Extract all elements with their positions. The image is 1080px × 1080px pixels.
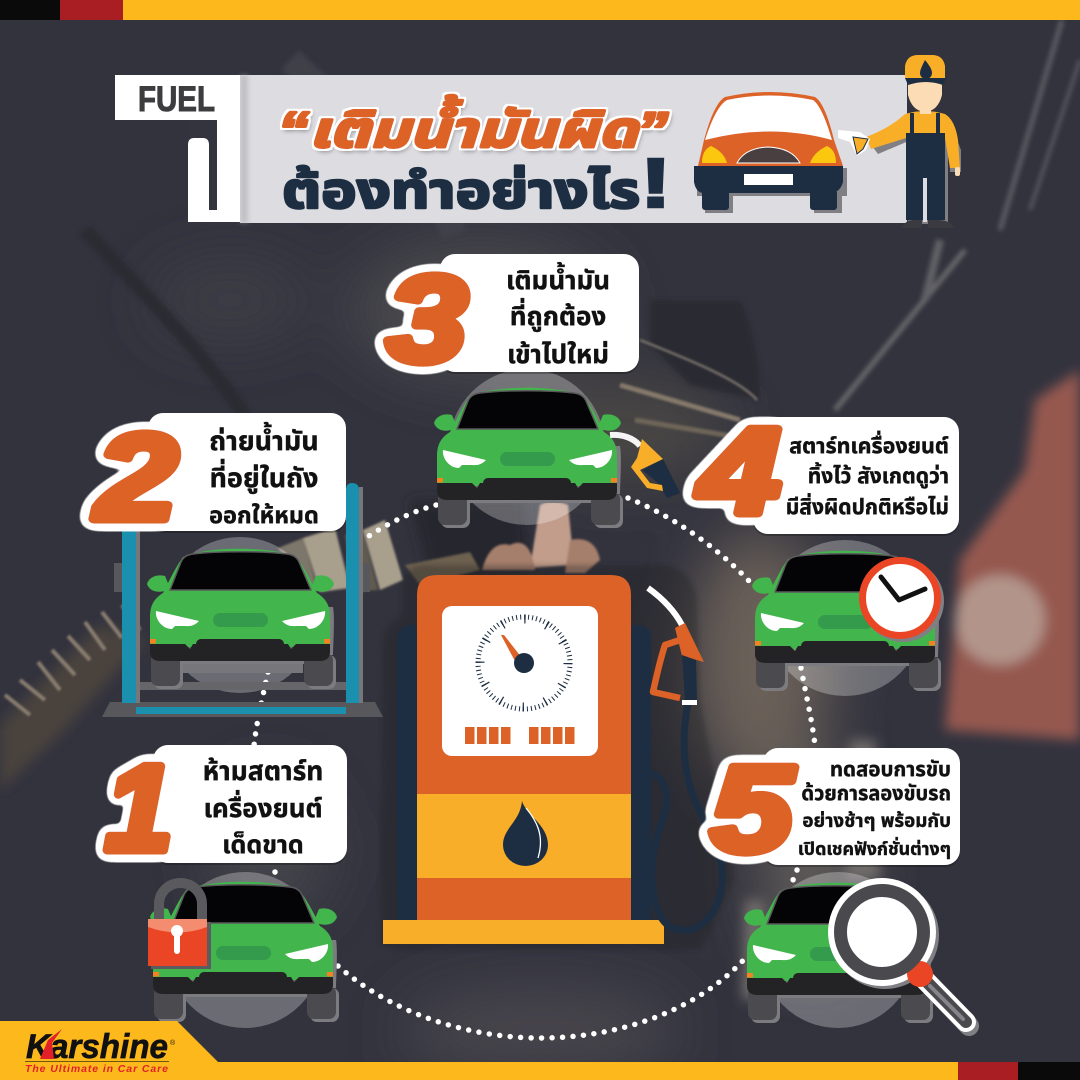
icon: mechanic refuelling [838, 55, 961, 228]
step 3 text: ที่ถูกต้อง [510, 298, 606, 332]
dotted connector path between cars [254, 498, 815, 1038]
vehicle lift [102, 483, 383, 717]
logo: Karshine: ® [170, 1039, 176, 1047]
bubble 2 [93, 409, 346, 545]
number 5: 5 [711, 741, 795, 877]
step 1 text: เครื่องยนต์ [203, 790, 323, 823]
car [752, 551, 941, 691]
bottom colour band [0, 1062, 1080, 1080]
step 1 text: เด็ดขาด [222, 831, 304, 859]
step 2 text: ถ่ายน้ำมัน [209, 422, 319, 456]
icon: fuel drop [503, 801, 548, 866]
step 4 text: ทิ้งไว้ สังเกตดูว่า [808, 462, 949, 489]
icon: orange car [694, 92, 847, 213]
icon: magnifying glass [828, 878, 969, 1026]
top colour band [0, 0, 1080, 20]
nozzle [648, 588, 704, 705]
car [434, 388, 623, 528]
step 1 text: ห้ามสตาร์ท [203, 756, 323, 786]
icon: padlock [148, 883, 211, 969]
logo: Karshine: The Ultimate in Car Care [25, 1063, 168, 1075]
step 3 text: เข้าไปใหม่ [507, 339, 609, 369]
icon: clock [862, 560, 944, 642]
bubble 4 [696, 403, 959, 539]
fuel pump [380, 565, 735, 950]
step 5: car with magnifier [711, 741, 969, 1028]
step 4 text: สตาร์ทเครื่องยนต์ [789, 430, 949, 458]
FUEL logo block: FUEL [138, 80, 215, 119]
FUEL logo block [115, 75, 240, 222]
logo: Karshine [0, 1021, 218, 1080]
step 5 text: ด้วยการลองขับรถ [801, 783, 951, 805]
car [150, 882, 339, 1022]
car [744, 883, 933, 1023]
digit counters [465, 727, 574, 744]
header panel [115, 75, 907, 223]
pump shadow [380, 565, 735, 950]
number 2: 2 [93, 409, 177, 545]
number 1: 1 [105, 740, 173, 876]
step 1: lock car [105, 740, 347, 1028]
gauge dial [478, 617, 570, 709]
step 4 text: มีสิ่งผิดปกติหรือไม่ [786, 493, 949, 519]
icon: yellow nozzle [610, 435, 680, 498]
step 5 text: ทดสอบการขับ [830, 758, 951, 781]
step 2 text: ที่อยู่ในถัง [210, 459, 318, 494]
bubble 3 [387, 251, 639, 388]
display panel [442, 606, 598, 756]
yellow band [417, 794, 631, 878]
step 5 text: อย่างช้าๆ พร้อมกับ [802, 810, 951, 831]
step 2 text: ออกให้หมด [209, 502, 319, 528]
step 3 text: เติมน้ำมัน [506, 262, 610, 295]
step 4: car with clock [696, 403, 959, 696]
pump navy sides [397, 625, 651, 920]
bubble 1 [105, 740, 347, 876]
base plate [383, 920, 664, 944]
bubble 5 [711, 741, 960, 877]
number 3: 3 [387, 251, 467, 388]
hose [651, 703, 723, 930]
exclamation mark: ! [640, 144, 671, 222]
pump body [417, 575, 631, 920]
step 5 text: เปิดเชคฟังก์ชั่นต่างๆ [798, 837, 951, 859]
step 3: car refuelling [387, 251, 680, 528]
car [147, 549, 336, 689]
logo: Karshine: Karshine [26, 1028, 168, 1066]
number 4: 4 [696, 403, 780, 539]
step 2: car on lift [93, 409, 383, 717]
title line 1: “เติมน้ำมันผิด” [278, 95, 668, 158]
title line 2: ต้องทำอย่างไร [282, 163, 640, 219]
